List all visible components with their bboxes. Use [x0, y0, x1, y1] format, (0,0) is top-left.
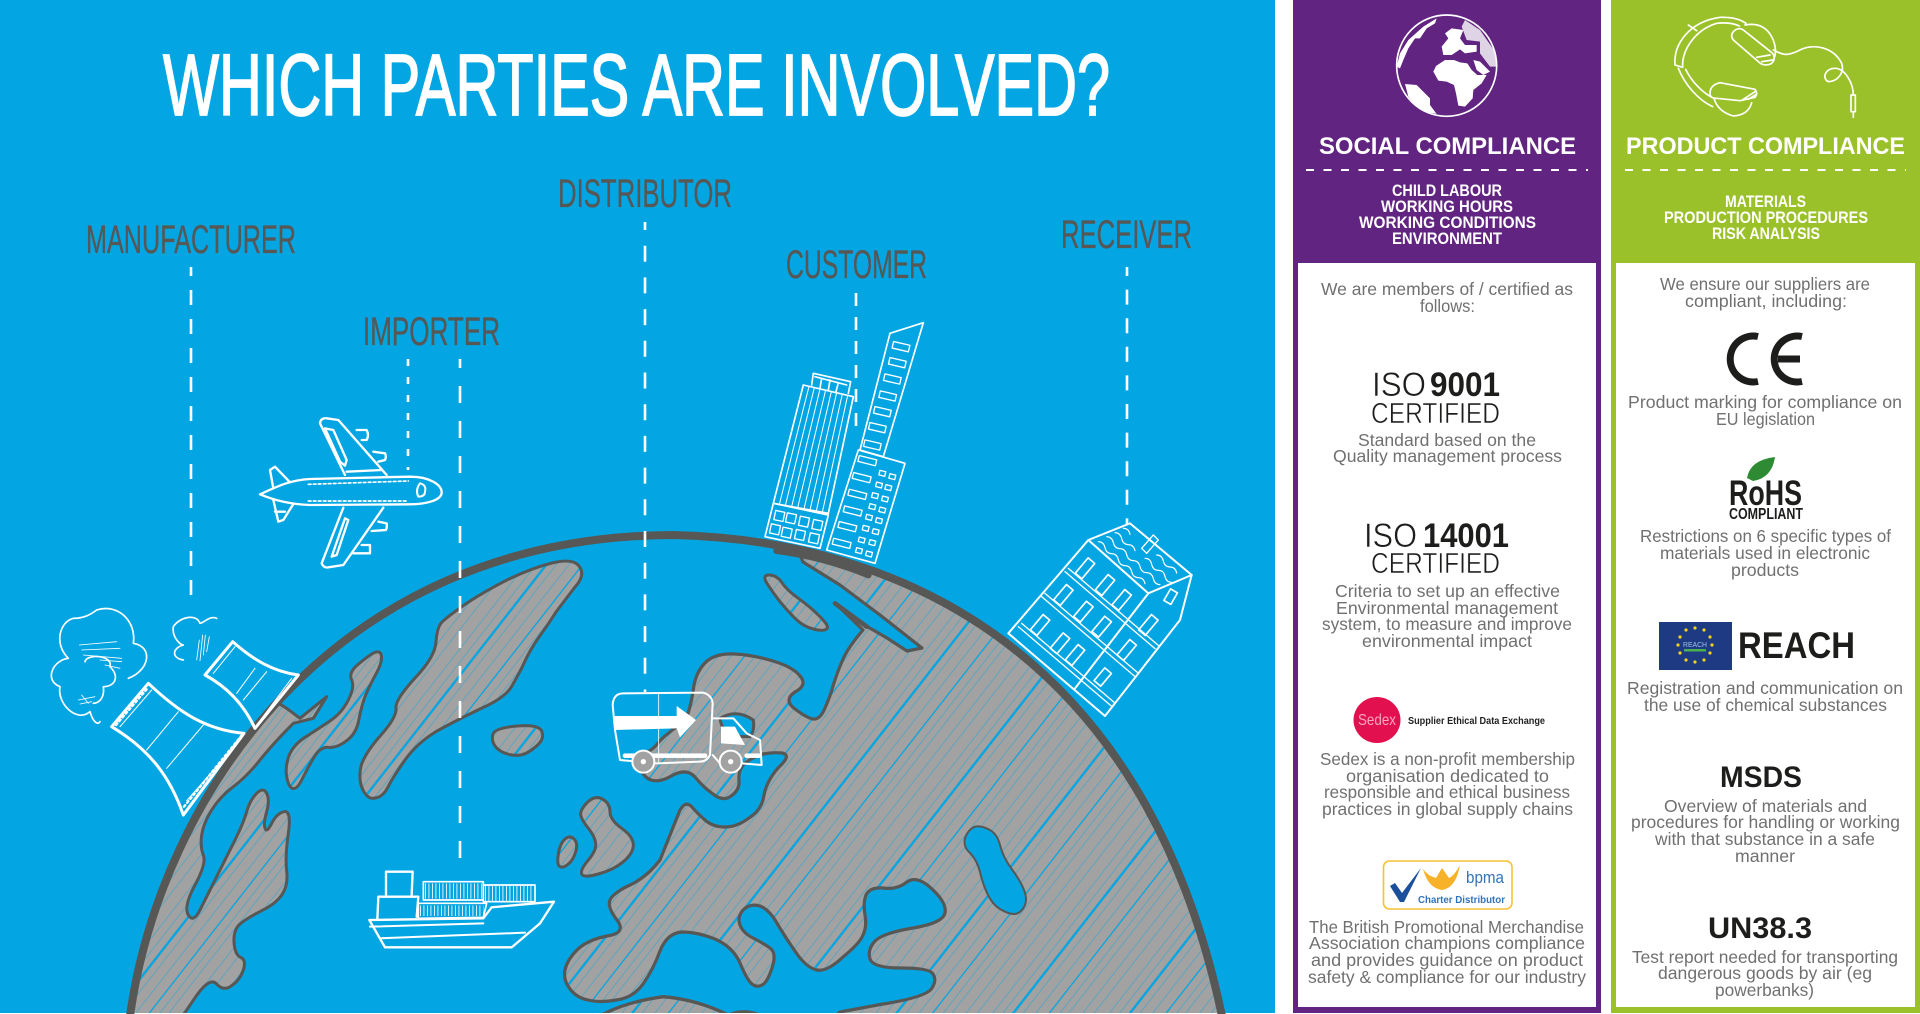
Sedex description: organisation dedicated to	[1346, 766, 1549, 786]
label: customer: CUSTOMER	[786, 243, 927, 287]
social compliance topics: WORKING CONDITIONS	[1359, 213, 1536, 232]
logo: ISO 9001: ISO	[1372, 366, 1426, 404]
icon: earth globe	[1397, 15, 1497, 116]
title: WHICH PARTIES ARE INVOLVED?	[163, 37, 1110, 134]
panel: social compliance	[1293, 0, 1601, 1013]
Sedex description	[1320, 749, 1575, 819]
social compliance topics: ENVIRONMENT	[1392, 229, 1503, 248]
ISO 14001 description: Environmental management	[1336, 598, 1558, 618]
Sedex description: Sedex is a non-profit membership	[1320, 749, 1575, 769]
lake: right	[965, 826, 1026, 914]
product compliance topics	[1664, 192, 1868, 243]
logo: Sedex: Sedex	[1358, 712, 1396, 729]
logo: RoHS compliant: RoHS	[1729, 474, 1802, 513]
logo: RoHS compliant: COMPLIANT	[1729, 506, 1803, 523]
logo: ISO 14001: 14001	[1423, 517, 1509, 555]
social compliance topics: WORKING HOURS	[1381, 197, 1513, 216]
logo: Sedex: Supplier Ethical Data Exchange	[1408, 715, 1545, 727]
panel: which parties are involved	[0, 0, 1300, 1014]
social compliance topics	[1359, 181, 1536, 248]
UN38.3 description: dangerous goods by air (eg	[1658, 963, 1872, 983]
logo: CE mark	[1730, 336, 1802, 382]
intro text	[1660, 274, 1870, 311]
CE description	[1628, 392, 1902, 429]
white arrow on truck	[614, 706, 696, 737]
heading: MSDS: MSDS	[1720, 761, 1802, 794]
panel: product compliance	[1611, 0, 1920, 1013]
UN38.3 description	[1632, 947, 1898, 1000]
ISO 9001 description	[1333, 430, 1562, 466]
social compliance topics: CHILD LABOUR	[1392, 181, 1502, 200]
REACH description: the use of chemical substances	[1644, 695, 1887, 715]
intro text	[1321, 279, 1573, 316]
RoHS description: products	[1731, 560, 1799, 580]
CE description: EU legislation	[1716, 409, 1815, 429]
BPMA description: Association champions compliance	[1309, 933, 1585, 953]
intro text: We are members of / certified as	[1321, 279, 1573, 299]
UN38.3 description: powerbanks)	[1715, 980, 1814, 1000]
icon: house	[1008, 523, 1192, 716]
continent: left landmass	[107, 652, 382, 1014]
BPMA description: and provides guidance on product	[1311, 950, 1583, 970]
logo: REACH: REACH	[1683, 642, 1707, 649]
MSDS description: manner	[1735, 846, 1795, 866]
intro text: We ensure our suppliers are	[1660, 274, 1870, 294]
white content area	[1616, 263, 1915, 1007]
REACH description	[1627, 678, 1903, 715]
island: upper peninsula	[765, 575, 867, 630]
icon: factory cooling towers with smoke	[51, 609, 298, 815]
Sedex description: responsible and ethical business	[1324, 782, 1570, 802]
purple card	[1293, 0, 1601, 1013]
label: manufacturer: MANUFACTURER	[86, 218, 296, 262]
icon: airplane	[260, 418, 442, 567]
logo: BPMA charter distributor: Charter Distributor	[1418, 894, 1505, 906]
Sedex description: practices in global supply chains	[1322, 799, 1573, 819]
logo: ISO 14001	[1364, 517, 1509, 580]
logo: BPMA charter distributor: bpma	[1466, 868, 1504, 887]
BPMA description: The British Promotional Merchandise	[1309, 917, 1584, 937]
MSDS description: Overview of materials and	[1664, 796, 1867, 816]
BPMA description	[1308, 917, 1586, 987]
logo: REACH: REACH	[1738, 625, 1855, 666]
RoHS description: materials used in electronic	[1660, 543, 1870, 563]
ISO 14001 description: Criteria to set up an effective	[1335, 581, 1560, 601]
globe with continents	[126, 531, 1226, 1014]
heading: PRODUCT COMPLIANCE	[1626, 133, 1905, 160]
globe outline	[130, 535, 1222, 1014]
label: receiver: RECEIVER	[1061, 213, 1192, 257]
MSDS description	[1631, 796, 1900, 866]
dashed connector lines	[191, 222, 1127, 860]
continent: large right landmass	[562, 558, 1218, 1013]
islands and bays	[558, 714, 760, 1014]
blue background	[0, 0, 1275, 1013]
BPMA description: safety & compliance for our industry	[1308, 967, 1586, 987]
CE description: Product marking for compliance on	[1628, 392, 1902, 412]
logo: ISO 14001: ISO	[1364, 517, 1417, 555]
ISO 14001 description: environmental impact	[1362, 631, 1532, 651]
logo: ISO 9001	[1371, 366, 1500, 430]
logo: RoHS compliant	[1729, 457, 1803, 523]
ISO 9001 description: Quality management process	[1333, 446, 1562, 466]
ISO 14001 description	[1322, 581, 1572, 651]
MSDS description: with that substance in a safe	[1654, 829, 1875, 849]
product compliance topics: RISK ANALYSIS	[1712, 224, 1820, 243]
white content area	[1298, 263, 1596, 1007]
icon: delivery truck	[613, 693, 762, 773]
ISO 9001 description: Standard based on the	[1358, 430, 1536, 450]
logo: ISO 9001: 9001	[1430, 366, 1500, 404]
MSDS description: procedures for handling or working	[1631, 812, 1900, 832]
logo: ISO 9001: CERTIFIED	[1371, 398, 1500, 430]
logo: ISO 14001: CERTIFIED	[1371, 548, 1500, 580]
intro text: follows:	[1420, 296, 1475, 316]
heading: UN38.3: UN38.3	[1708, 912, 1812, 945]
logo: Sedex	[1354, 697, 1545, 743]
thick ground under buildings	[777, 551, 868, 575]
product compliance topics: MATERIALS	[1725, 192, 1806, 211]
label: distributor: DISTRIBUTOR	[558, 172, 732, 216]
heading: SOCIAL COMPLIANCE	[1319, 133, 1576, 160]
icon: headphones	[1675, 17, 1855, 117]
icon: skyscrapers	[765, 323, 923, 563]
logo: BPMA charter distributor	[1384, 861, 1512, 909]
island: small central	[492, 726, 543, 755]
continent: central long landmass	[360, 561, 582, 798]
REACH description: Registration and communication on	[1627, 678, 1903, 698]
logo: REACH	[1659, 622, 1855, 670]
intro text: compliant, including:	[1685, 291, 1847, 311]
ISO 14001 description: system, to measure and improve	[1322, 614, 1572, 634]
RoHS description	[1640, 526, 1891, 580]
green card	[1611, 0, 1920, 1013]
icon: container ship	[369, 872, 554, 947]
label: importer: IMPORTER	[363, 310, 500, 354]
product compliance topics: PRODUCTION PROCEDURES	[1664, 208, 1868, 227]
RoHS description: Restrictions on 6 specific types of	[1640, 526, 1891, 546]
UN38.3 description: Test report needed for transporting	[1632, 947, 1898, 967]
